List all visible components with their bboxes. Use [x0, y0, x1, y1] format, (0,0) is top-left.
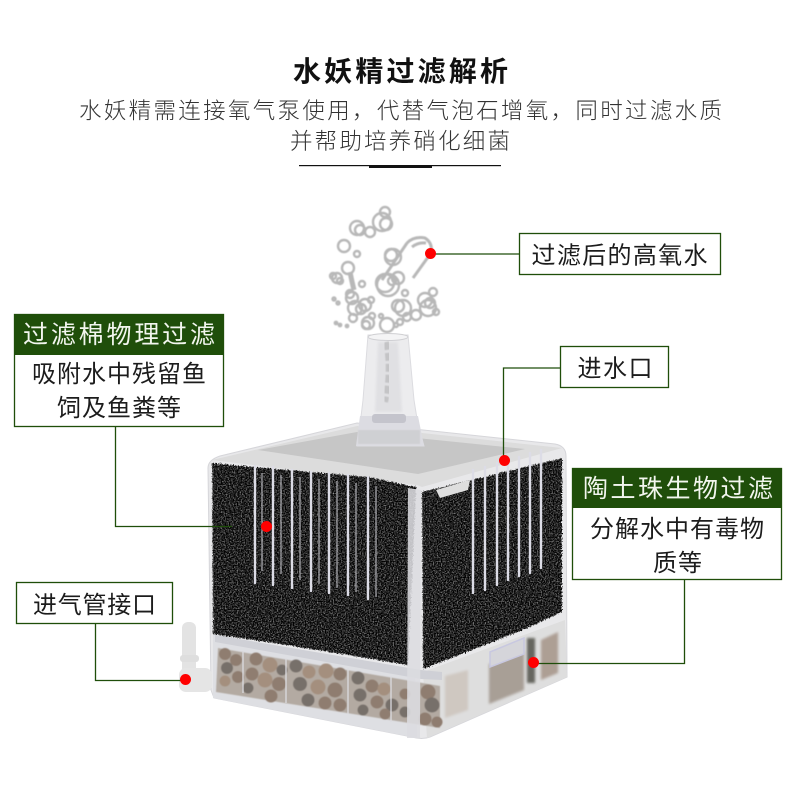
- callout: ceramic bead biological filtration: 分解水中有毒物: [590, 516, 764, 543]
- title divider: [299, 165, 501, 168]
- callout: ceramic bead biological filtration: 陶土珠生物过滤: [583, 475, 773, 503]
- callout: air tube port: [16, 582, 191, 685]
- subtitle text: 水妖精需连接氧气泵使用，代替气泡石增氧，同时过滤水质: [79, 98, 722, 124]
- side vent: [490, 638, 524, 667]
- callout: sponge physical filtration: 过滤棉物理过滤: [23, 321, 215, 349]
- callout: sponge physical filtration: [14, 314, 272, 532]
- lid highlight on right face: [436, 480, 470, 498]
- band between foam and pebbles: [215, 635, 442, 680]
- subtitle text: [79, 98, 722, 154]
- left face ribs: [255, 466, 376, 599]
- lower pebble chamber right face: [423, 620, 567, 738]
- right side pebbles through clear wall: [445, 632, 558, 718]
- foam right face: [422, 458, 562, 669]
- nozzle: [356, 334, 424, 446]
- illustration: rising oxygen bubbles: [330, 207, 439, 332]
- illustration: aeration filter cube: [179, 334, 567, 738]
- pebbles: [216, 648, 442, 728]
- air tube connector: [179, 622, 212, 692]
- callout: sponge physical filtration: 吸附水中残留鱼: [32, 361, 206, 388]
- top lid: [212, 426, 562, 487]
- foam left face: [212, 463, 416, 665]
- outer transparent shell: [208, 423, 567, 738]
- callout: water inlet: [499, 346, 668, 466]
- lower pebble chamber left face: [213, 634, 417, 738]
- front corner post: [407, 488, 421, 738]
- title: 水妖精过滤解析: [293, 56, 508, 87]
- callout: ceramic bead biological filtration: 质等: [653, 550, 702, 577]
- callout: filtered oxygen water: 过滤后的高氧水: [532, 242, 708, 270]
- callout: ceramic bead biological filtration: [528, 468, 782, 668]
- callout: sponge physical filtration: 饲及鱼粪等: [57, 395, 181, 422]
- right face ribs: [473, 450, 541, 593]
- callout: water inlet: 进水口: [578, 356, 652, 382]
- callout: filtered oxygen water: [425, 234, 720, 274]
- callout: air tube port: 进气管接口: [33, 592, 156, 619]
- subtitle text: 并帮助培养硝化细菌: [290, 129, 510, 154]
- chamber dividers: [243, 652, 391, 722]
